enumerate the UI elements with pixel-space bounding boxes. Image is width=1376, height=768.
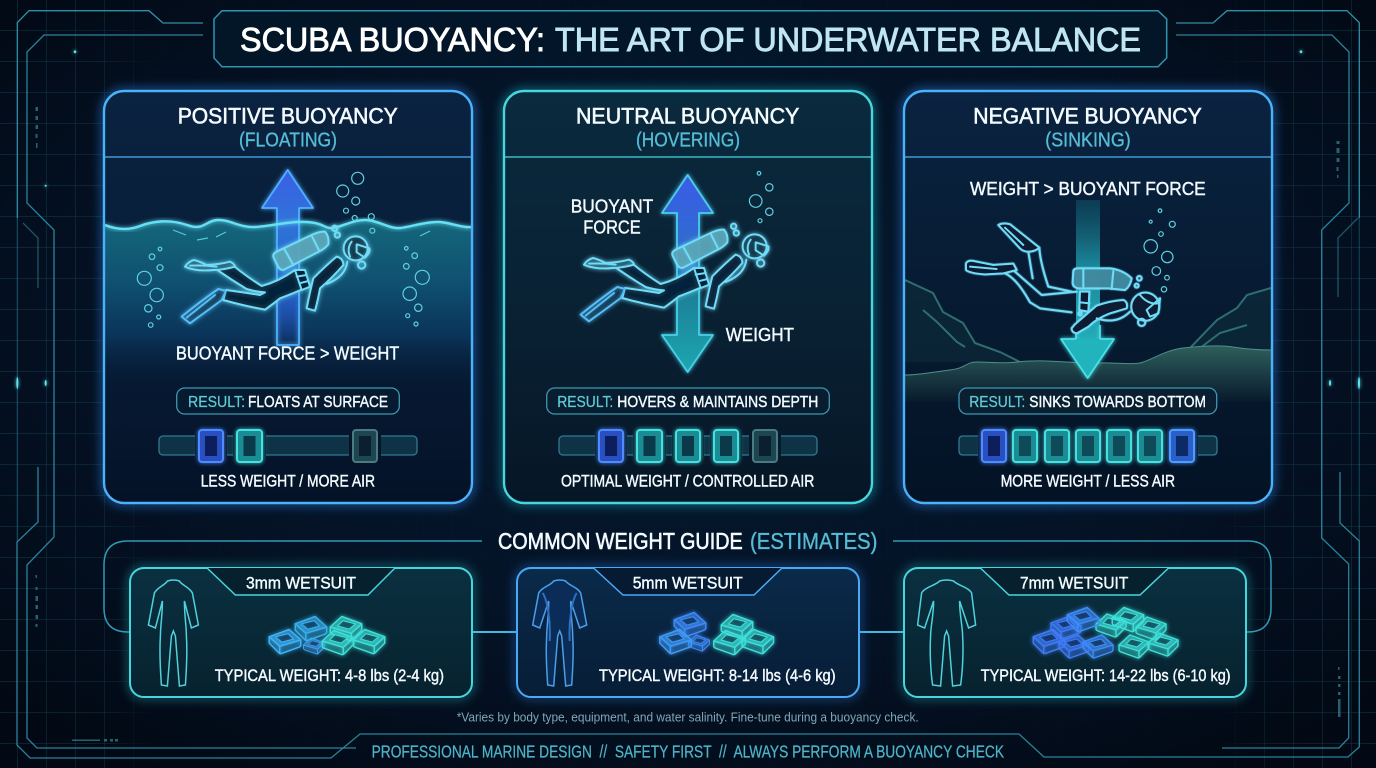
- panel: neutral buoyancy: [504, 91, 872, 503]
- heading: [178, 104, 398, 152]
- bubbles: [137, 172, 429, 327]
- icon: wetsuit: [148, 580, 198, 686]
- force labels: FORCE: [583, 216, 641, 237]
- card: 3mm wetsuit: [130, 568, 472, 697]
- arrow: buoyant force and weight: [662, 175, 713, 372]
- card: 3mm wetsuit: TYPICAL WEIGHT: 4-8 lbs (2-4 kg): [215, 666, 444, 685]
- caption: MORE WEIGHT / LESS AIR: [1001, 472, 1175, 490]
- arrow: weight down: [1061, 200, 1114, 378]
- card: 3mm wetsuit: 3mm WETSUIT: [246, 573, 356, 592]
- heading: NEUTRAL BUOYANCY: [576, 104, 799, 129]
- footnote: *Varies by body type, equipment, and water salinity. Fine-tune during a buoyancy check.: [457, 710, 919, 724]
- result pill: [959, 388, 1217, 414]
- title: SCUBA BUOYANCY:: [240, 22, 545, 59]
- icon: weights: [660, 612, 773, 655]
- title: [214, 11, 1167, 67]
- card: 7mm wetsuit: [904, 568, 1246, 697]
- result pill: [177, 388, 399, 414]
- guide heading: COMMON WEIGHT GUIDE: [498, 528, 743, 554]
- weight belt: [559, 430, 817, 462]
- caption: OPTIMAL WEIGHT / CONTROLLED AIR: [561, 472, 814, 490]
- panel: positive buoyancy: [104, 91, 472, 503]
- heading: [973, 104, 1202, 152]
- tech tick marks: [36, 107, 1340, 742]
- force labels: WEIGHT: [726, 324, 794, 345]
- result pill: RESULT:: [557, 394, 613, 411]
- card: 5mm wetsuit: TYPICAL WEIGHT: 8-14 lbs (4-6 kg): [599, 666, 836, 685]
- caption: LESS WEIGHT / MORE AIR: [201, 472, 375, 490]
- force label: BUOYANT FORCE > WEIGHT: [176, 342, 399, 363]
- heading: NEGATIVE BUOYANCY: [973, 104, 1202, 129]
- bubbles: [1144, 209, 1175, 292]
- panel border and header rule: [904, 91, 1272, 503]
- force labels: [571, 195, 794, 345]
- diver floating: [182, 226, 370, 323]
- heading: POSITIVE BUOYANCY: [178, 104, 398, 129]
- diver hovering: [581, 224, 769, 321]
- tab: [980, 568, 1169, 595]
- guide heading: (ESTIMATES): [750, 528, 877, 554]
- tab: [594, 568, 782, 595]
- result pill: HOVERS & MAINTAINS DEPTH: [617, 394, 818, 411]
- force labels: BUOYANT: [571, 195, 653, 216]
- title: THE ART OF UNDERWATER BALANCE: [555, 22, 1141, 59]
- heading: (FLOATING): [239, 130, 337, 152]
- icon: wetsuit: [918, 580, 976, 686]
- result pill: RESULT:: [969, 394, 1025, 411]
- icon: weights: [1033, 608, 1178, 658]
- card: 5mm wetsuit: 5mm WETSUIT: [633, 573, 743, 592]
- card: 7mm wetsuit: 7mm WETSUIT: [1020, 573, 1128, 592]
- weight belt: [959, 430, 1217, 462]
- result pill: RESULT:: [188, 394, 245, 411]
- result pill: FLOATS AT SURFACE: [248, 394, 388, 411]
- icon: weights: [269, 616, 385, 655]
- icon: wetsuit: [533, 580, 587, 686]
- tab: [207, 568, 395, 595]
- arrow: buoyant force up: [262, 170, 313, 345]
- water: [105, 221, 471, 364]
- card: 5mm wetsuit: [517, 568, 859, 697]
- result pill: SINKS TOWARDS BOTTOM: [1029, 394, 1206, 411]
- panel border and header rule: [104, 91, 472, 503]
- force label: WEIGHT > BUOYANT FORCE: [970, 178, 1206, 199]
- arrow head: [1061, 325, 1114, 378]
- glowing grid nodes: [16, 50, 1360, 389]
- footer strip: PROFESSIONAL MARINE DESIGN // SAFETY FIRST // ALWAYS PERFORM A BUOYANCY CHECK: [372, 741, 1004, 761]
- seabed and rocks: [905, 280, 1271, 402]
- panel border and header rule: [504, 91, 872, 503]
- wave line: [105, 220, 471, 229]
- weight guide section: [104, 528, 1271, 697]
- heading: [576, 104, 799, 152]
- diver sinking: [966, 223, 1160, 333]
- weight belt: [159, 430, 417, 462]
- card: 7mm wetsuit: TYPICAL WEIGHT: 14-22 lbs (6-10 kg): [981, 666, 1231, 685]
- heading: (SINKING): [1045, 130, 1131, 152]
- heading: (HOVERING): [636, 130, 740, 152]
- bubbles: [749, 172, 773, 223]
- panel: negative buoyancy: [904, 91, 1272, 503]
- guide frame connectors: [104, 541, 1271, 632]
- result pill: [547, 388, 829, 414]
